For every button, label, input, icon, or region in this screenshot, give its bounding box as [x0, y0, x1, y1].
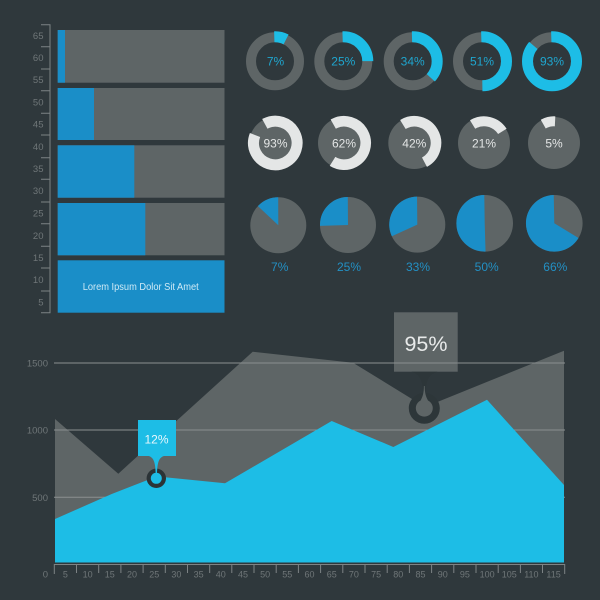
donut 51%	[458, 37, 506, 86]
donut 51%: 51%	[470, 55, 494, 69]
pie 25%: 25%	[337, 260, 361, 274]
callout: 12% marker: 12%	[144, 432, 169, 446]
x axis ticks and labels: 85	[415, 570, 426, 580]
x axis ticks and labels: 110	[524, 570, 539, 580]
donut 93%	[528, 37, 576, 86]
donut 34%	[388, 37, 437, 86]
panel: vertical scale axis: 60	[33, 53, 44, 64]
ring 5%	[525, 114, 583, 172]
bar row 4	[58, 203, 225, 255]
cyan area series	[55, 400, 564, 562]
pie 66%: 66%	[543, 260, 568, 274]
x axis ticks and labels: 70	[349, 570, 359, 580]
ring 93%: 93%	[263, 136, 288, 150]
panel: vertical scale axis: 50	[33, 98, 44, 108]
x axis ticks and labels: 30	[171, 570, 181, 580]
x axis ticks and labels: 25	[149, 570, 159, 580]
pie 50%	[456, 195, 513, 274]
x axis ticks and labels: 40	[216, 570, 226, 580]
x axis ticks and labels: 115	[546, 570, 561, 580]
pie 7%	[250, 197, 306, 274]
callout: 12% marker	[138, 420, 176, 488]
x axis ticks and labels: 5	[63, 570, 68, 580]
panel: vertical scale axis: 55	[33, 75, 44, 86]
ring 93%	[246, 114, 305, 172]
grey area series	[55, 351, 564, 562]
ring 42%	[385, 113, 444, 173]
panel: area chart	[27, 312, 565, 580]
y axis gridlines and labels	[27, 358, 565, 580]
panel: pie chart row	[250, 195, 583, 274]
bar row 3	[58, 145, 225, 198]
x axis ticks and labels: 100	[480, 570, 495, 580]
panel: vertical scale axis: 30	[33, 186, 44, 197]
ring 42%: 42%	[402, 136, 427, 150]
panel: vertical scale axis: 10	[33, 275, 44, 286]
bar row 2	[58, 88, 225, 140]
panel: vertical scale axis: 25	[33, 208, 44, 220]
panel: vertical scale axis	[33, 25, 50, 313]
x axis ticks and labels: 95	[460, 570, 470, 580]
x axis ticks and labels: 65	[327, 570, 337, 580]
x axis ticks and labels: 50	[260, 570, 270, 580]
pie 33%: 33%	[406, 260, 430, 274]
donut 25%	[319, 37, 368, 86]
donut 7%: 7%	[267, 55, 285, 69]
donut 7%	[250, 37, 300, 86]
y axis gridlines and labels: 500	[32, 493, 48, 504]
panel: white ring on grey disc row	[246, 113, 583, 173]
panel: vertical scale axis: 20	[33, 231, 44, 242]
x axis ticks and labels: 15	[105, 570, 115, 580]
ring 21%: 21%	[472, 136, 496, 150]
y axis gridlines and labels: 1500	[27, 358, 48, 370]
ring 62%	[315, 114, 373, 172]
x axis ticks and labels: 20	[127, 570, 137, 580]
panel: vertical scale axis: 45	[33, 120, 44, 130]
pie 25%	[320, 197, 376, 274]
y axis gridlines and labels: 0	[43, 570, 48, 580]
x axis ticks and labels: 10	[83, 570, 93, 580]
ring 62%: 62%	[332, 136, 356, 150]
x axis ticks and labels: 75	[371, 570, 381, 580]
x axis ticks and labels: 90	[438, 570, 448, 580]
x axis ticks and labels	[54, 564, 565, 580]
bar row 1	[58, 30, 225, 83]
callout: 95% marker	[394, 312, 458, 424]
pie 33%	[389, 197, 445, 274]
x axis ticks and labels: 35	[194, 570, 204, 580]
x axis ticks and labels: 45	[238, 570, 248, 580]
bar row 5 with label	[58, 260, 225, 313]
pie 50%: 50%	[475, 260, 499, 274]
x axis ticks and labels: 60	[304, 570, 315, 580]
ring 5%: 5%	[545, 136, 563, 150]
panel: vertical scale axis: 35	[33, 164, 44, 175]
pie 7%: 7%	[271, 260, 289, 274]
y axis gridlines and labels: 1000	[27, 426, 48, 436]
panel: vertical scale axis: 65	[33, 31, 44, 42]
ring 21%	[454, 113, 514, 173]
panel: vertical scale axis: 15	[33, 253, 44, 264]
x axis ticks and labels: 105	[502, 570, 517, 580]
donut 25%: 25%	[331, 55, 356, 69]
x axis ticks and labels: 80	[393, 570, 403, 580]
panel: vertical scale axis: 5	[38, 298, 44, 308]
bar row 5 with label: Lorem Ipsum Dolor Sit Amet	[83, 281, 199, 293]
panel: cyan donut row	[250, 37, 576, 86]
pie 66%	[526, 195, 583, 274]
callout: 95% marker: 95%	[404, 332, 448, 356]
x axis ticks and labels: 55	[282, 570, 292, 580]
donut 93%: 93%	[540, 55, 564, 69]
panel: vertical scale axis: 40	[33, 142, 44, 153]
panel: stacked horizontal bars	[58, 30, 225, 313]
donut 34%: 34%	[401, 55, 425, 69]
